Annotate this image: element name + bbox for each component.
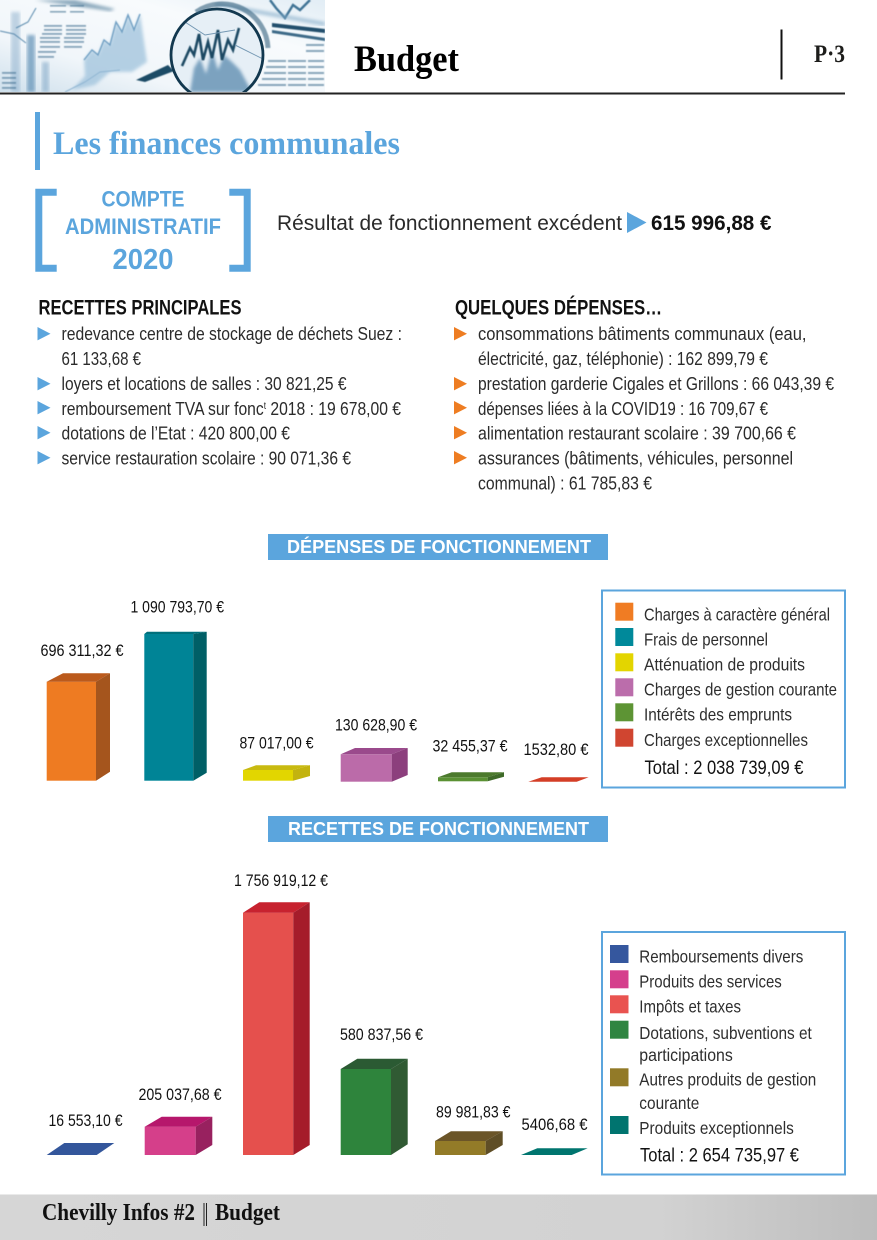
- section heading: Budget: Budget: [354, 39, 460, 80]
- bullet list: consommations bâtiments communaux (eau,: [478, 323, 806, 344]
- bar: frais de personnel: [130, 598, 224, 781]
- bar: interets des emprunts: [432, 736, 508, 781]
- main title: Les finances communales: Les finances communales: [53, 126, 400, 162]
- bullet list: alimentation restaurant scolaire : 39 700,66 €: [478, 422, 797, 444]
- bracket badge: compte administratif 2020: 2020: [112, 244, 174, 276]
- header rule: [0, 92, 845, 94]
- bullet list: communal) : 61 785,83 €: [478, 472, 653, 494]
- bar: autres produits de gestion courante: [435, 1102, 510, 1155]
- bar: produits exceptionnels: 5406,68 €: [522, 1115, 588, 1134]
- legend: recettes: Autres produits de gestion: [639, 1070, 816, 1090]
- bullet list: service restauration scolaire : 90 071,36 €: [62, 448, 352, 468]
- heading: RECETTES PRINCIPALES: [38, 296, 242, 320]
- bullet list: [454, 323, 835, 494]
- legend: recettes: Dotations, subventions et: [639, 1023, 812, 1043]
- bullet list: 2018 : 19 678,00 €: [266, 398, 402, 419]
- bar: remboursements divers: [47, 1111, 123, 1155]
- legend: recettes: Produits des services: [639, 972, 782, 992]
- bullet list: dotations de l’Etat : 420 800,00 €: [62, 422, 291, 444]
- page separator: [780, 30, 782, 80]
- bar: impots et taxes: [234, 871, 328, 1155]
- legend: depenses: Charges exceptionnelles: [644, 730, 808, 750]
- bar: charges a caractere general: [40, 641, 124, 781]
- bar: charges de gestion courante: 130 628,90 €: [335, 716, 417, 734]
- bar: dotations subventions participations: 580 837,56 €: [340, 1025, 423, 1044]
- bar: attenuation de produits: [240, 734, 314, 781]
- bar: produits des services: [138, 1085, 222, 1155]
- bar: interets des emprunts: 32 455,37 €: [432, 736, 508, 756]
- legend: recettes: participations: [639, 1045, 733, 1065]
- bullet list: électricité, gaz, téléphonie) : 162 899,79 €: [478, 348, 769, 369]
- panel: quelques depenses: [454, 296, 835, 494]
- bar: impots et taxes: 1 756 919,12 €: [234, 871, 328, 890]
- banner: depenses de fonctionnement: DÉPENSES DE FONCTIONNEMENT: [287, 536, 592, 557]
- legend: recettes: courante: [639, 1093, 699, 1113]
- bullet list: dépenses liées à la COVID19 : 16 709,67 €: [478, 398, 769, 419]
- bar: produits des services: 205 037,68 €: [138, 1085, 222, 1104]
- bar: autres produits de gestion courante: 89 981,83 €: [436, 1102, 510, 1121]
- panel: recettes principales: [38, 296, 402, 468]
- bar: charges exceptionnelles: 1532,80 €: [524, 740, 588, 759]
- bar: remboursements divers: 16 553,10 €: [48, 1111, 122, 1130]
- footer band: Chevilly Infos #2: [42, 1200, 195, 1226]
- legend: depenses: Intérêts des emprunts: [644, 705, 792, 725]
- bar chart: recettes: [47, 871, 588, 1155]
- legend: depenses: [602, 590, 845, 788]
- legend: depenses: Atténuation de produits: [644, 655, 805, 675]
- bar: charges a caractere general: 696 311,32 €: [40, 641, 124, 660]
- legend: depenses: Charges de gestion courante: [644, 680, 837, 700]
- legend: recettes: Total : 2 654 735,97 €: [640, 1145, 799, 1167]
- legend: depenses: Total : 2 038 739,09 €: [644, 757, 804, 779]
- header photo: financial charts under a magnifying glass: [0, 0, 325, 101]
- legend: depenses: Frais de personnel: [644, 630, 768, 650]
- page number: P·3: [814, 41, 845, 68]
- footer band: Budget: [215, 1200, 280, 1226]
- bullet list: redevance centre de stockage de déchets Suez :: [62, 323, 402, 344]
- result line: 615 996,88 €: [651, 211, 772, 235]
- bullet list: loyers et locations de salles : 30 821,25 €: [62, 373, 347, 394]
- legend: recettes: [602, 932, 845, 1174]
- bar chart: depenses: [40, 598, 589, 782]
- main title: Les finances communales: [35, 112, 400, 170]
- bar: produits exceptionnels: [521, 1115, 588, 1155]
- result line: Résultat de fonctionnement excédent: [277, 211, 622, 235]
- bullet list: remboursement TVA sur fonc: [62, 398, 302, 419]
- legend: depenses: Charges à caractère général: [644, 605, 830, 625]
- bar: charges de gestion courante: [335, 716, 417, 782]
- bracket badge: compte administratif 2020: COMPTE: [102, 186, 184, 212]
- bar: frais de personnel: 1 090 793,70 €: [130, 598, 224, 616]
- legend: recettes: Remboursements divers: [639, 947, 803, 967]
- bar: dotations subventions participations: [340, 1025, 423, 1155]
- bar: attenuation de produits: 87 017,00 €: [240, 734, 314, 752]
- bullet list: 61 133,68 €: [62, 348, 142, 369]
- legend: recettes: Produits exceptionnels: [639, 1118, 794, 1138]
- legend: recettes: Impôts et taxes: [639, 997, 741, 1017]
- bullet list: assurances (bâtiments, véhicules, personnel: [478, 448, 793, 468]
- bullet list: [38, 323, 402, 468]
- heading: QUELQUES DÉPENSES…: [455, 296, 662, 320]
- footer band: [0, 1194, 877, 1240]
- bracket badge: compte administratif 2020: [39, 186, 247, 276]
- banner: recettes de fonctionnement: RECETTES DE FONCTIONNEMENT: [288, 818, 590, 839]
- bullet list: t: [264, 401, 266, 412]
- bracket badge: compte administratif 2020: ADMINISTRATIF: [65, 214, 221, 239]
- bar: charges exceptionnelles: [524, 740, 589, 782]
